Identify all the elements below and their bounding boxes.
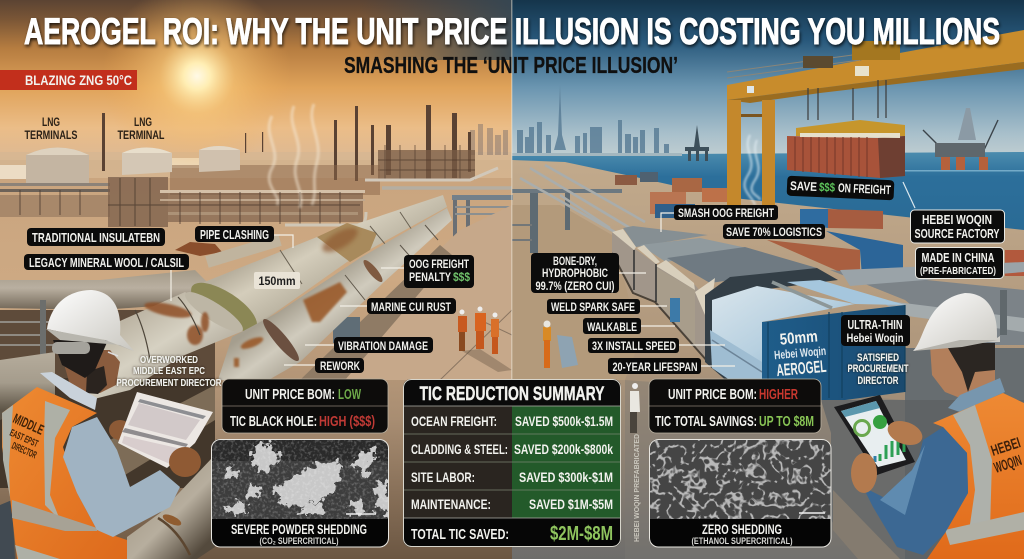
lower left pipes bbox=[0, 300, 215, 559]
left worker: procurement director: DIRECTOR bbox=[10, 441, 38, 461]
label: LNG terminals: TERMINALS bbox=[24, 128, 78, 142]
label: LNG terminals bbox=[24, 115, 78, 142]
callout: smash OOG freight: SMASH OOG FREIGHT bbox=[678, 206, 774, 220]
callout: OOG freight penalty bbox=[381, 255, 474, 288]
callout: walkable: WALKABLE bbox=[587, 320, 637, 334]
pointing hand bbox=[884, 417, 926, 449]
container label: 50mm Hebei Woqin Aerogel: Hebei Woqin bbox=[774, 344, 827, 362]
legacy horizontal pipe bbox=[0, 270, 210, 310]
badge: made in China: (PRE-FABRICATED) bbox=[920, 265, 996, 277]
label: LNG terminal bbox=[118, 115, 164, 142]
row: cladding and steel: CLADDING & STEEL: bbox=[411, 441, 508, 457]
badge: source factory bbox=[910, 210, 1004, 243]
caption: satisfied director bbox=[848, 352, 909, 387]
callout: hydrophobic bbox=[531, 253, 646, 293]
container label: 50mm Hebei Woqin Aerogel: AEROGEL bbox=[776, 357, 827, 380]
callout: 150mm thickness: 150mm bbox=[258, 274, 296, 288]
row: total TIC saved bbox=[411, 523, 613, 545]
row: maintenance: SAVED $1M-$5M bbox=[529, 496, 613, 512]
aerogel pre-fabricated module bbox=[612, 226, 905, 402]
callout: legacy mineral wool bbox=[24, 254, 189, 301]
tablet dashboard bbox=[834, 395, 915, 475]
badge: made in China bbox=[916, 248, 1004, 278]
caption: severe powder shedding: SEVERE POWDER SHEDDING bbox=[231, 522, 367, 537]
background: cool right scene bbox=[512, 0, 1024, 559]
caption: satisfied director: DIRECTOR bbox=[858, 375, 899, 387]
callout: legacy mineral wool: LEGACY MINERAL WOOL / CALSIL bbox=[29, 256, 184, 270]
SEM scale bar bbox=[346, 513, 376, 515]
main insulated pipe with rust bbox=[70, 195, 447, 400]
caption: satisfied director: SATISFIED bbox=[857, 352, 899, 364]
callout: marine CUI rust: MARINE CUI RUST bbox=[371, 300, 451, 314]
center divider bbox=[511, 0, 512, 379]
callout: hydrophobic: 99.7% (ZERO CUI) bbox=[536, 281, 615, 293]
callout: OOG freight penalty: PENALTY bbox=[409, 270, 451, 284]
caption: overworked director: OVERWORKED bbox=[140, 354, 198, 366]
row: cladding and steel: SAVED $200k-$800k bbox=[514, 441, 613, 457]
panel: left unit price comparison: HIGH ($$$) bbox=[319, 414, 375, 430]
dark frame bbox=[705, 268, 838, 398]
callout: vibration damage bbox=[305, 337, 433, 353]
distant city skyline and oil rig bbox=[512, 85, 709, 161]
caption: zero shedding: ZERO SHEDDING bbox=[702, 522, 782, 537]
callout: walkable bbox=[583, 318, 675, 334]
SEM scale bar bbox=[799, 512, 825, 514]
chamfer strips bbox=[612, 229, 636, 250]
head bbox=[930, 345, 995, 400]
blue aerogel container bbox=[762, 305, 905, 400]
callout: hydrophobic: HYDROPHOBIC bbox=[542, 268, 608, 280]
subtitle: SMASHING THE ‘UNIT PRICE ILLUSION’ bbox=[344, 52, 678, 78]
label: LNG terminals: LNG bbox=[42, 115, 60, 129]
background: hot left scene bbox=[0, 0, 513, 559]
shirt sleeve bbox=[863, 427, 968, 555]
hi-vis vest bbox=[2, 387, 127, 559]
caption: overworked director: PROCUREMENT DIRECTOR bbox=[116, 377, 222, 389]
left worker: procurement director: MIDDLE bbox=[11, 410, 47, 438]
heat banner bbox=[0, 70, 137, 90]
holding hand bbox=[851, 453, 877, 493]
right road and pipe rack bbox=[512, 165, 645, 380]
left worker: procurement director: EAST EPST bbox=[8, 428, 40, 450]
callout: save on freight: SAVE bbox=[790, 179, 817, 194]
shirt collar bbox=[40, 372, 97, 410]
hanging red shipping container bbox=[787, 80, 905, 178]
row: TIC total savings: TIC TOTAL SAVINGS: bbox=[655, 414, 757, 430]
panel: right unit price comparison: HIGHER bbox=[759, 387, 798, 403]
badge: source factory: HEBEI WOQIN bbox=[922, 213, 992, 227]
callout: pipe clashing: PIPE CLASHING bbox=[200, 228, 269, 242]
side wall bbox=[612, 232, 708, 362]
callout: marine CUI rust bbox=[340, 298, 456, 314]
upper hand bbox=[109, 420, 131, 440]
three site workers bbox=[458, 306, 512, 372]
panel: right unit price comparison: UP TO $8M bbox=[759, 414, 814, 430]
heat banner: BLAZING ZNG 50°C bbox=[25, 72, 132, 88]
insulation roll bbox=[712, 286, 855, 378]
callout: rework bbox=[284, 358, 364, 373]
callout: hydrophobic: BONE-DRY, bbox=[553, 256, 597, 268]
row: TIC black hole: TIC BLACK HOLE: bbox=[230, 414, 317, 430]
callout: traditional insulation bbox=[27, 228, 165, 246]
callout: vibration damage: VIBRATION DAMAGE bbox=[338, 339, 428, 353]
hi-vis vest bbox=[927, 393, 1024, 559]
callout: weld spark safe: WELD SPARK SAFE bbox=[551, 300, 635, 314]
small inspector in white bbox=[630, 383, 640, 433]
heat waves bbox=[269, 104, 318, 208]
hard hat bbox=[913, 293, 1000, 351]
panel: TIC reduction summary bbox=[403, 379, 621, 547]
row: site labor: SITE LABOR: bbox=[411, 469, 475, 485]
callout: OOG freight penalty: OOG FREIGHT bbox=[409, 257, 469, 271]
caption: satisfied director: PROCUREMENT bbox=[848, 363, 909, 375]
callout: smash OOG freight bbox=[661, 205, 778, 232]
clipboard BOM sheet bbox=[118, 392, 213, 468]
neck and face bbox=[60, 350, 120, 393]
caption: overworked director: MIDDLE EAST EPC bbox=[133, 365, 205, 377]
callout: rework: REWORK bbox=[320, 359, 360, 373]
label: LNG terminal: LNG bbox=[134, 115, 152, 129]
callout: save on freight bbox=[787, 176, 894, 200]
row: ocean freight: OCEAN FREIGHT: bbox=[411, 413, 497, 429]
row: unit price low: UNIT PRICE BOM: bbox=[245, 387, 335, 403]
left worker: procurement director bbox=[2, 290, 213, 559]
row: total TIC saved: $2M-$8M bbox=[550, 523, 613, 545]
callout: save 70% logistics: SAVE 70% LOGISTICS bbox=[726, 225, 822, 239]
row: site labor: SAVED $300k-$1M bbox=[519, 469, 613, 485]
row: site labor bbox=[411, 469, 613, 485]
gantry crane bbox=[727, 30, 1024, 205]
left refinery skyline bbox=[102, 105, 508, 195]
right worker: satisfied director bbox=[834, 293, 1024, 559]
callout: ultra-thin: ULTRA-THIN bbox=[848, 318, 902, 332]
row: unit price higher: UNIT PRICE BOM: bbox=[668, 387, 757, 403]
shirt sleeve bbox=[63, 417, 180, 537]
panel: left unit price comparison bbox=[222, 379, 388, 433]
panel: SEM zero shedding: (ETHANOL SUPERCRITICAL) bbox=[692, 536, 792, 547]
callout: OOG freight penalty: $$$ bbox=[453, 270, 470, 284]
caption: overworked director bbox=[116, 354, 222, 389]
right rear pipes bbox=[830, 262, 1024, 423]
container label: 50mm Hebei Woqin Aerogel: 50mm bbox=[779, 328, 818, 349]
hard hat bbox=[47, 290, 134, 351]
row: maintenance bbox=[411, 496, 613, 512]
callout: save on freight: ON FREIGHT bbox=[838, 181, 891, 197]
row: ocean freight: SAVED $500k-$1.5M bbox=[515, 413, 613, 429]
callout: lifespan: 20-YEAR LIFESPAN bbox=[612, 360, 698, 374]
callout: save on freight: $$$ bbox=[819, 180, 835, 195]
arrow: container to source factory bbox=[903, 182, 915, 208]
header: TIC REDUCTION SUMMARY bbox=[420, 384, 605, 405]
roof panels bbox=[623, 226, 708, 247]
panel: SEM powder shedding bbox=[211, 439, 388, 547]
small engineer at module bbox=[543, 320, 578, 368]
row: ocean freight bbox=[411, 413, 613, 429]
panel: SEM powder shedding: (CO₂ SUPERCRITICAL) bbox=[260, 536, 338, 547]
elbow pipe behind main run bbox=[207, 240, 280, 262]
callout: traditional insulation: TRADITIONAL INSULATEBN bbox=[32, 230, 160, 245]
callout: install speed: 3X INSTALL SPEED bbox=[592, 339, 676, 353]
vertical fine print: HEBEI WOQIN PREFABRICATED bbox=[634, 434, 641, 542]
row: total TIC saved: TOTAL TIC SAVED: bbox=[411, 526, 509, 543]
callout: ultra-thin bbox=[841, 315, 910, 346]
concrete support and deck under the pipes bbox=[300, 205, 512, 380]
container label: 50mm Hebei Woqin Aerogel bbox=[772, 328, 828, 380]
quay container stacks bbox=[615, 172, 1024, 277]
callout: pipe clashing bbox=[195, 226, 293, 248]
callout: ultra-thin: Hebei Woqin bbox=[846, 331, 904, 345]
left pipe racks and steel structures bbox=[0, 168, 513, 250]
second insulated pipe with rust bbox=[218, 208, 452, 382]
rising heat lines at crane bbox=[744, 135, 760, 205]
ground rubble pile bbox=[175, 242, 222, 256]
panel: left unit price comparison: LOW bbox=[338, 387, 361, 403]
panel: right unit price comparison bbox=[649, 379, 821, 433]
label: LNG terminal: TERMINAL bbox=[118, 128, 164, 142]
offshore oil rig bbox=[923, 108, 998, 170]
panel: SEM zero shedding bbox=[649, 439, 831, 547]
badge: made in China: MADE IN CHINA bbox=[922, 251, 994, 265]
row: maintenance: MAINTENANCE: bbox=[411, 496, 491, 512]
LNG storage tanks bbox=[26, 146, 240, 184]
right lower platform bbox=[625, 380, 1024, 559]
lower hand bbox=[169, 447, 201, 477]
